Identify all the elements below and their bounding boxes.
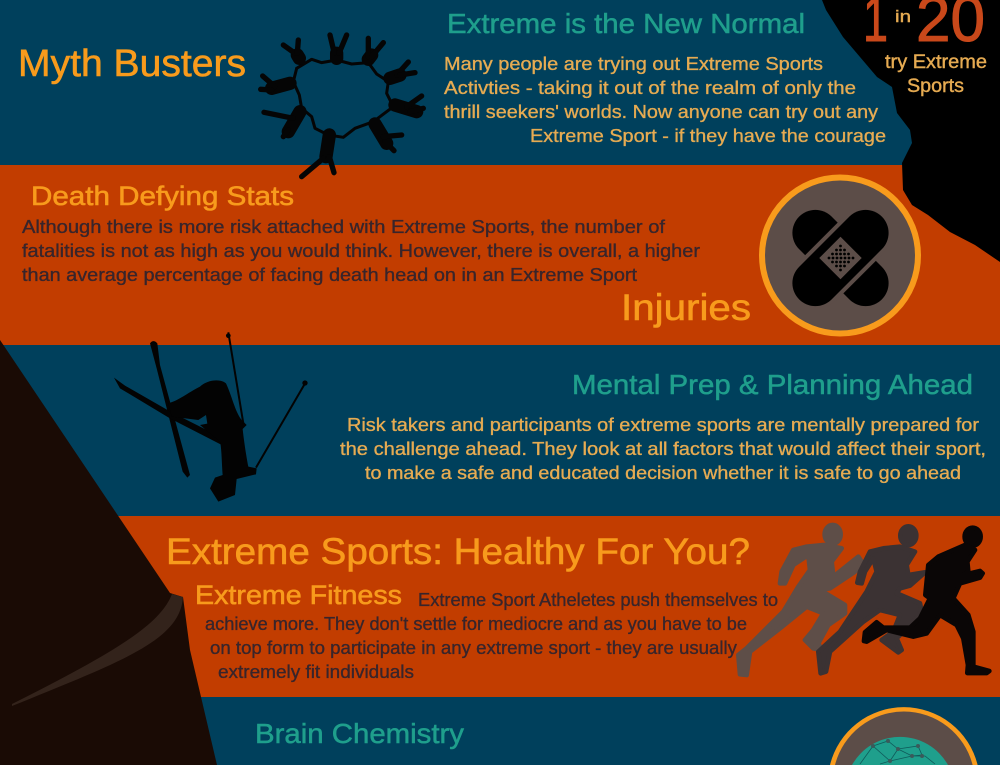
text block: extreme normal: Activties - taking it out of the realm of only the (444, 77, 856, 98)
text block: extreme fitness: extremely fit individuals (218, 661, 414, 682)
black cliff shape (822, 0, 1000, 262)
text block: death defying stats: Although there is more risk attached with Extreme Sports, the number of (22, 216, 666, 237)
text block: mental prep: to make a safe and educated decision whether it is safe to go ahead (365, 462, 961, 483)
panel: death defying stats (22, 178, 918, 334)
text block: death defying stats: than average percentage of facing death head on in an Extreme Sport (22, 264, 637, 285)
panel: mental prep (114, 332, 986, 502)
icon: brain network (830, 707, 978, 765)
heading: extreme fitness: Extreme Fitness (195, 580, 402, 610)
text block: extreme normal: Many people are trying out Extreme Sports (444, 53, 823, 74)
callout: 1 in 20: Sports (907, 76, 964, 97)
text block: extreme fitness: achieve more. They don't settle for mediocre and as you have to be (205, 613, 747, 634)
panel: brain chemistry (255, 707, 978, 765)
text block: extreme normal: thrill seekers' worlds. Now anyone can try out any (444, 101, 879, 122)
icon: skier silhouette (114, 332, 308, 502)
heading: mental prep: Mental Prep & Planning Ahead (572, 369, 973, 400)
text block: extreme normal (444, 53, 886, 146)
text block: extreme normal: Extreme Sport - if they have the courage (530, 125, 886, 146)
text block: extreme fitness: Extreme Sport Atheletes push themselves to (418, 589, 778, 610)
callout: 1 in 20: try Extreme (885, 52, 987, 73)
heading: myth busters: Myth Busters (18, 43, 246, 85)
icon: skydiver ring (261, 35, 423, 177)
panel: extreme is the new normal (444, 8, 886, 146)
text block: mental prep (340, 414, 986, 483)
callout: 1 in 20: in (895, 7, 911, 26)
dark left rock shape (0, 340, 217, 765)
heading: death defying stats: Death Defying Stats (31, 181, 294, 211)
text block: extreme fitness: on top form to participate in any extreme sport - they are usually (210, 637, 738, 658)
heading: injuries: Injuries (621, 287, 751, 328)
heading: brain chemistry: Brain Chemistry (255, 718, 464, 749)
text block: extreme fitness (205, 589, 778, 682)
panel: healthy for you (166, 525, 989, 682)
text block: mental prep: the challenge ahead. They look at all factors that would affect their sport, (340, 438, 986, 459)
icon: crossed bandage (762, 178, 918, 334)
heading: extreme normal: Extreme is the New Normal (447, 8, 805, 39)
text block: death defying stats (22, 216, 700, 285)
text block: death defying stats: fatalities is not as high as you would think. However, there is overall, a higher (22, 240, 700, 261)
text block: mental prep: Risk takers and participants of extreme sports are mentally prepared for (347, 414, 979, 435)
icon: three runners (738, 525, 989, 675)
callout: 1 in 20 (863, 0, 987, 97)
panel: myth busters (18, 35, 423, 177)
heading: healthy for you: Extreme Sports: Healthy For You? (166, 531, 750, 572)
